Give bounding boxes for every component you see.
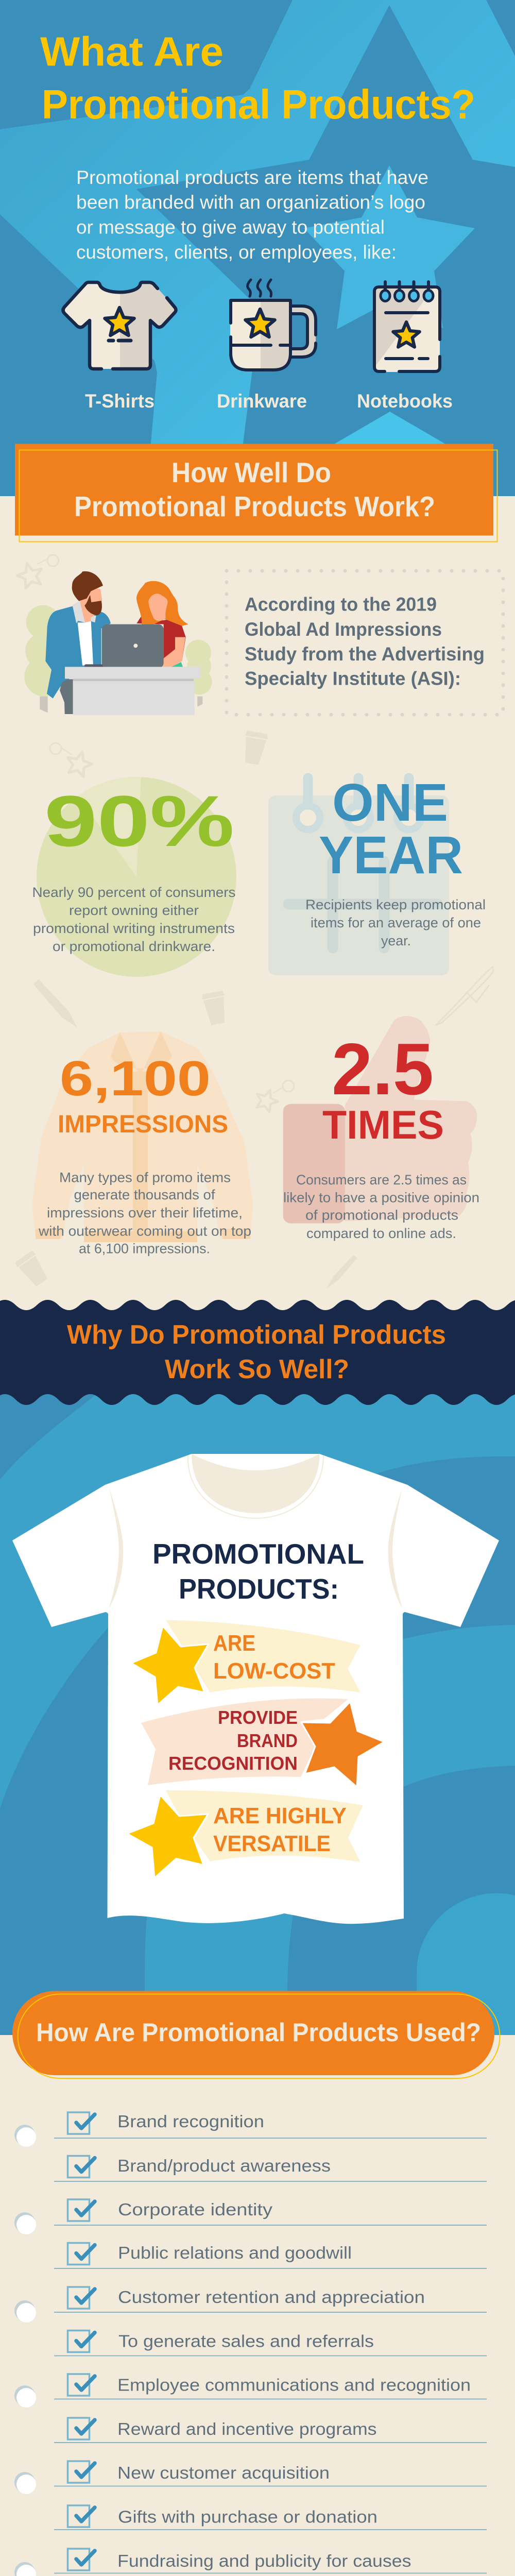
ribbon: are low-cost: ARE [213, 1631, 255, 1656]
product labels: Drinkware [217, 391, 307, 412]
checklist [54, 2112, 487, 2573]
product labels [85, 391, 453, 412]
icon: notebook [374, 282, 440, 372]
stat: 6,100 impressions: generate thousands of [74, 1187, 215, 1202]
title: What Are [40, 29, 224, 74]
stat: 90 percent [32, 777, 236, 977]
ribbon: are highly versatile: VERSATILE [213, 1831, 331, 1856]
intro paragraph: been branded with an organization’s logo [76, 192, 425, 213]
panel: blue t-shirt background [0, 1391, 515, 2035]
stat: 2.5 times: Consumers are 2.5 times as [296, 1172, 467, 1188]
t-shirt graphic [12, 1454, 499, 1924]
ribbon: provide brand recognition [141, 1698, 384, 1787]
ribbon: provide brand recognition: BRAND [237, 1730, 298, 1751]
ribbon: are highly versatile [127, 1790, 363, 1878]
intro paragraph: customers, clients, or employees, like: [76, 242, 397, 263]
intro paragraph [76, 167, 428, 263]
check marks [76, 2114, 95, 2565]
panel: why do promotional products work so well: Work So Well? [165, 1354, 349, 1384]
list items: Employee communications and recognition [117, 2376, 471, 2395]
list items: Reward and incentive programs [117, 2419, 377, 2438]
stat: one year: year. [381, 933, 411, 948]
callout: study source in dotted box [227, 571, 503, 715]
title [40, 29, 475, 127]
stat: 90 percent: 90% [44, 781, 234, 861]
faded background promo items [14, 555, 493, 1291]
heading banner: how well do promotional products work [15, 444, 497, 542]
product labels: T-Shirts [85, 391, 154, 412]
intro paragraph: Promotional products are items that have [76, 167, 428, 188]
list items: Public relations and goodwill [118, 2243, 352, 2262]
stat: 90 percent: report owning either [69, 903, 199, 918]
title: Promotional Products? [42, 81, 475, 127]
panel: why do promotional products work so well: Why Do Promotional Products [67, 1320, 446, 1350]
list items: Brand/product awareness [117, 2156, 331, 2175]
ribbon: are highly versatile: ARE HIGHLY [213, 1803, 347, 1828]
thumbs up backdrop [283, 1016, 477, 1224]
stat: 6,100 impressions: 6,100 [60, 1051, 211, 1106]
list items: Brand recognition [117, 2112, 264, 2131]
list items: Corporate identity [118, 2200, 273, 2219]
stat: one year: YEAR [319, 825, 463, 885]
stat: 6,100 impressions: Many types of promo items [59, 1170, 231, 1185]
stat: 2.5 times: TIMES [322, 1102, 444, 1147]
stat: one year: items for an average of one [311, 915, 481, 930]
stat: one year [268, 773, 486, 975]
stat: 2.5 times: compared to online ads. [306, 1226, 456, 1241]
jacket backdrop [32, 1031, 253, 1242]
product labels: Notebooks [357, 391, 453, 412]
list items: Fundraising and publicity for causes [117, 2551, 411, 2570]
stat: 2.5 times: likely to have a positive opinion [283, 1190, 479, 1206]
intro paragraph: or message to give away to potential [76, 216, 385, 238]
panel: checklist background [0, 2035, 515, 2576]
panel: what are promotional products [0, 0, 515, 496]
stat: 2.5 times [283, 1016, 479, 1241]
stat: 90 percent: or promotional drinkware. [53, 939, 215, 954]
heading banner: how well do promotional products work: Promotional Products Work? [74, 490, 435, 522]
shirt heading [152, 1538, 364, 1605]
stat: 90 percent: Nearly 90 percent of consumers [32, 885, 236, 900]
illustration: two people at a laptop [24, 571, 212, 715]
stat: 2.5 times: of promotional products [305, 1208, 458, 1223]
list items: New customer acquisition [117, 2463, 330, 2482]
list items [117, 2112, 471, 2570]
stat: 90 percent: promotional writing instruments [33, 921, 235, 936]
icon: t-shirt [63, 282, 176, 369]
ribbon: are low-cost: LOW-COST [213, 1658, 335, 1684]
stat: one year: ONE [332, 773, 448, 832]
callout: study source in dotted box: Specialty Institute (ASI): [245, 668, 461, 689]
icon: mug [230, 280, 316, 370]
stat: 6,100 impressions [32, 1031, 253, 1257]
notebook holes [14, 2125, 36, 2576]
callout: study source in dotted box: According to the 2019 [245, 594, 437, 615]
shirt heading: PROMOTIONAL [152, 1538, 364, 1570]
pie chart backdrop [37, 777, 236, 977]
shirt heading: PRODUCTS: [179, 1573, 339, 1605]
panel: why do promotional products work so well [0, 1300, 515, 1405]
calendar backdrop [268, 778, 449, 975]
stat: 6,100 impressions: at 6,100 impressions. [79, 1241, 210, 1257]
heading pill: how are promotional products used: How Are Promotional Products Used? [36, 2018, 481, 2047]
stat: 6,100 impressions: impressions over their lifetime, [47, 1205, 243, 1221]
callout: study source in dotted box: Study from the Advertising [245, 643, 485, 665]
checkboxes [68, 2112, 90, 2570]
rule lines [54, 2138, 487, 2573]
ribbon: provide brand recognition: PROVIDE [218, 1707, 298, 1728]
list items: Customer retention and appreciation [118, 2287, 425, 2307]
list items: Gifts with purchase or donation [118, 2507, 377, 2527]
ribbon: provide brand recognition: RECOGNITION [168, 1753, 298, 1774]
stat: 6,100 impressions: with outerwear coming out on top [38, 1223, 251, 1239]
stat: 6,100 impressions: IMPRESSIONS [58, 1111, 228, 1138]
heading pill: how are promotional products used [12, 1991, 500, 2078]
stat: 2.5 times: 2.5 [332, 1028, 434, 1110]
ribbon: are low-cost [131, 1620, 360, 1705]
heading banner: how well do promotional products work: How Well Do [171, 456, 331, 488]
list items: To generate sales and referrals [118, 2332, 374, 2351]
stat: one year: Recipients keep promotional [305, 897, 486, 912]
callout: study source in dotted box: Global Ad Impressions [245, 619, 442, 640]
